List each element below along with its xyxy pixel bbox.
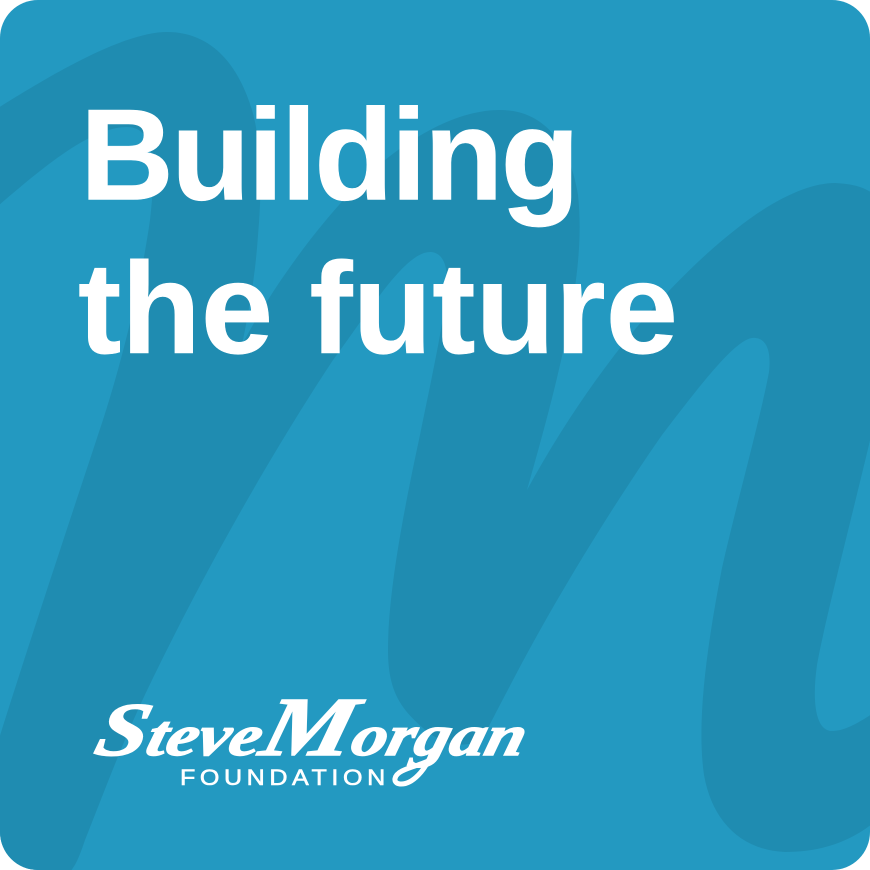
logo subtitle: FOUNDATION [180,765,385,790]
title line 2: the future [78,235,678,381]
logo wordmark: SteveMorgan [87,680,541,774]
logo g descender swash [395,752,436,784]
title line 1: Building [80,82,580,228]
logo: Steve Morgan Foundation [87,680,541,790]
title [78,82,678,381]
